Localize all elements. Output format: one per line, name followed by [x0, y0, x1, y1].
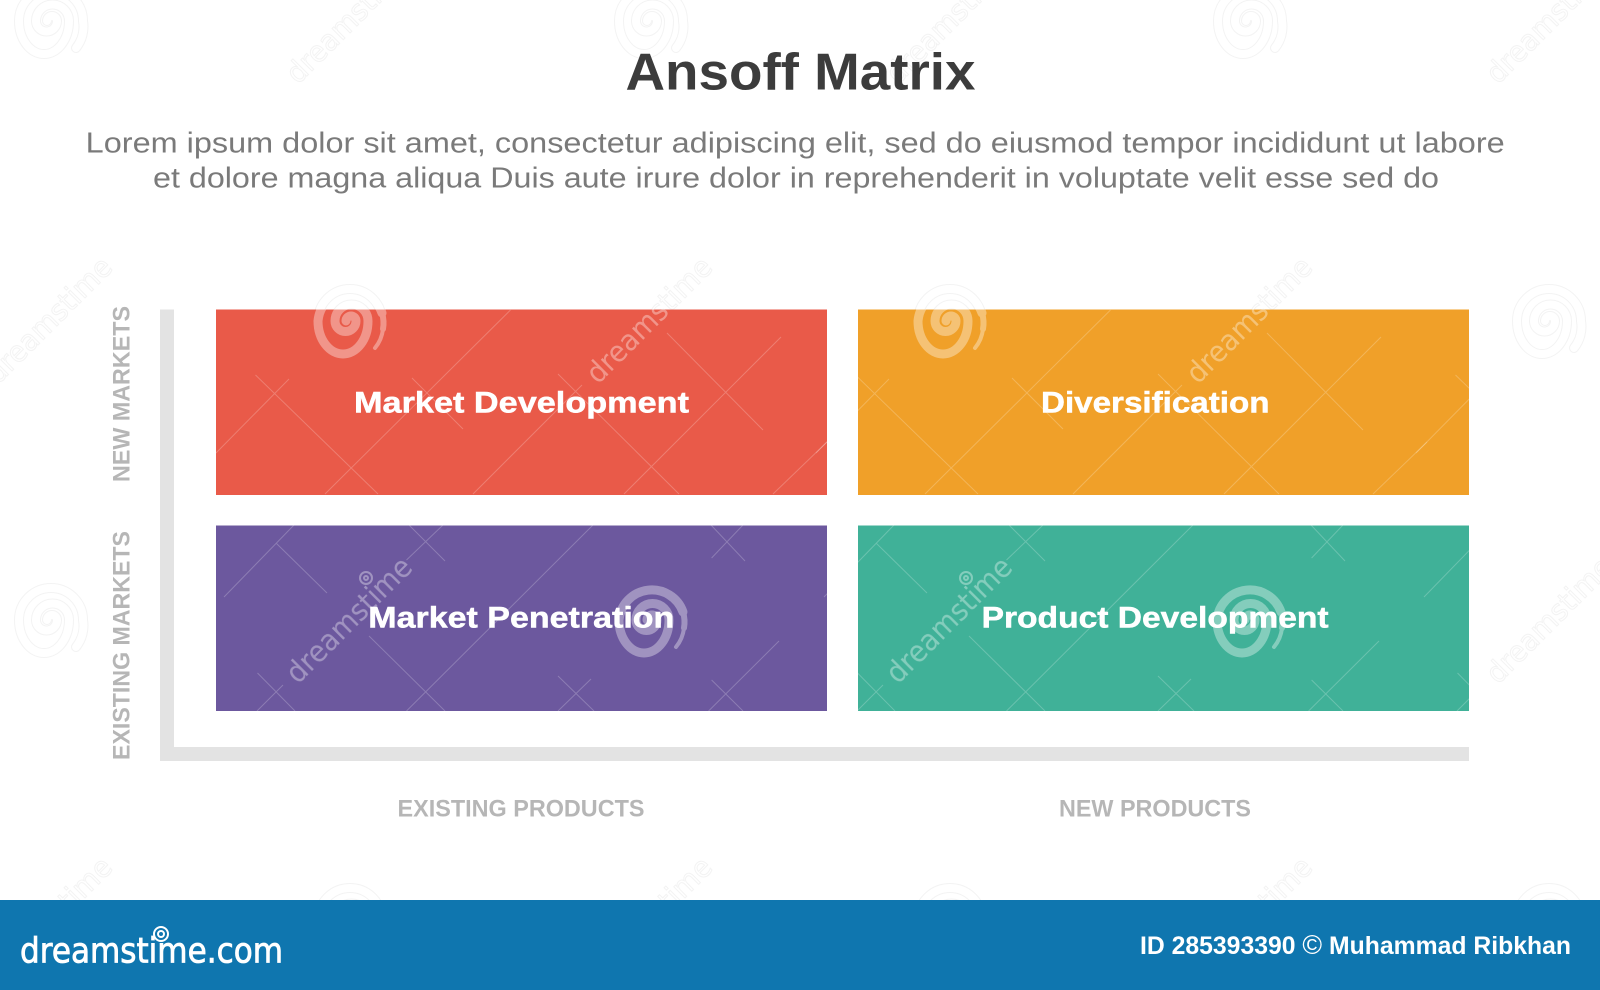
banner credit text: ID 285393390 © Muhammad Ribkhan [1140, 930, 1571, 960]
watermark: overlay on coloured panels [216, 310, 1469, 711]
watermark: faint background pattern: dreamstime [1179, 250, 1319, 390]
subtitle text block: Lorem ipsum dolor sit amet, consectetur adipiscing elit, sed do eiusmod tempor incididunt ut labore [86, 128, 1505, 160]
banner logo text: dreamstime.com [20, 932, 283, 972]
subtitle text block: et dolore magna aliqua Duis aute irure dolor in reprehenderit in voluptate velit esse sed do [153, 163, 1439, 195]
icon: logo spiral [154, 927, 168, 941]
x axis label: new products: NEW PRODUCTS [1059, 796, 1251, 822]
watermark: faint background pattern: dreamstime [579, 850, 719, 990]
matrix axes [160, 310, 1469, 761]
watermark: overlay on coloured panels: dreamstime [1179, 250, 1319, 390]
y axis label: existing markets: EXISTING MARKETS [108, 531, 136, 760]
label: diversification: Diversification [1041, 386, 1270, 420]
panel: market penetration [216, 526, 827, 711]
label: product development: Product Development [982, 602, 1329, 634]
watermark: faint background pattern: dreamstime [1179, 850, 1319, 990]
watermark: faint background pattern: dreamstime [579, 250, 719, 390]
panel: diversification [858, 310, 1469, 495]
x axis label: existing products: EXISTING PRODUCTS [398, 796, 644, 822]
watermark: overlay on coloured panels: dreamstime [279, 550, 419, 690]
title: Ansoff Matrix [626, 44, 976, 102]
panel: product development [858, 526, 1469, 711]
label: market penetration: Market Penetration [368, 602, 674, 634]
label: market development: Market Development [354, 386, 689, 420]
panel: market development [216, 310, 827, 495]
footer banner [0, 900, 1600, 990]
watermark: overlay on coloured panels: dreamstime [879, 550, 1019, 690]
watermark: overlay on coloured panels: dreamstime [579, 250, 719, 390]
y axis label: new markets: NEW MARKETS [108, 306, 136, 482]
subtitle text block [86, 128, 1505, 195]
